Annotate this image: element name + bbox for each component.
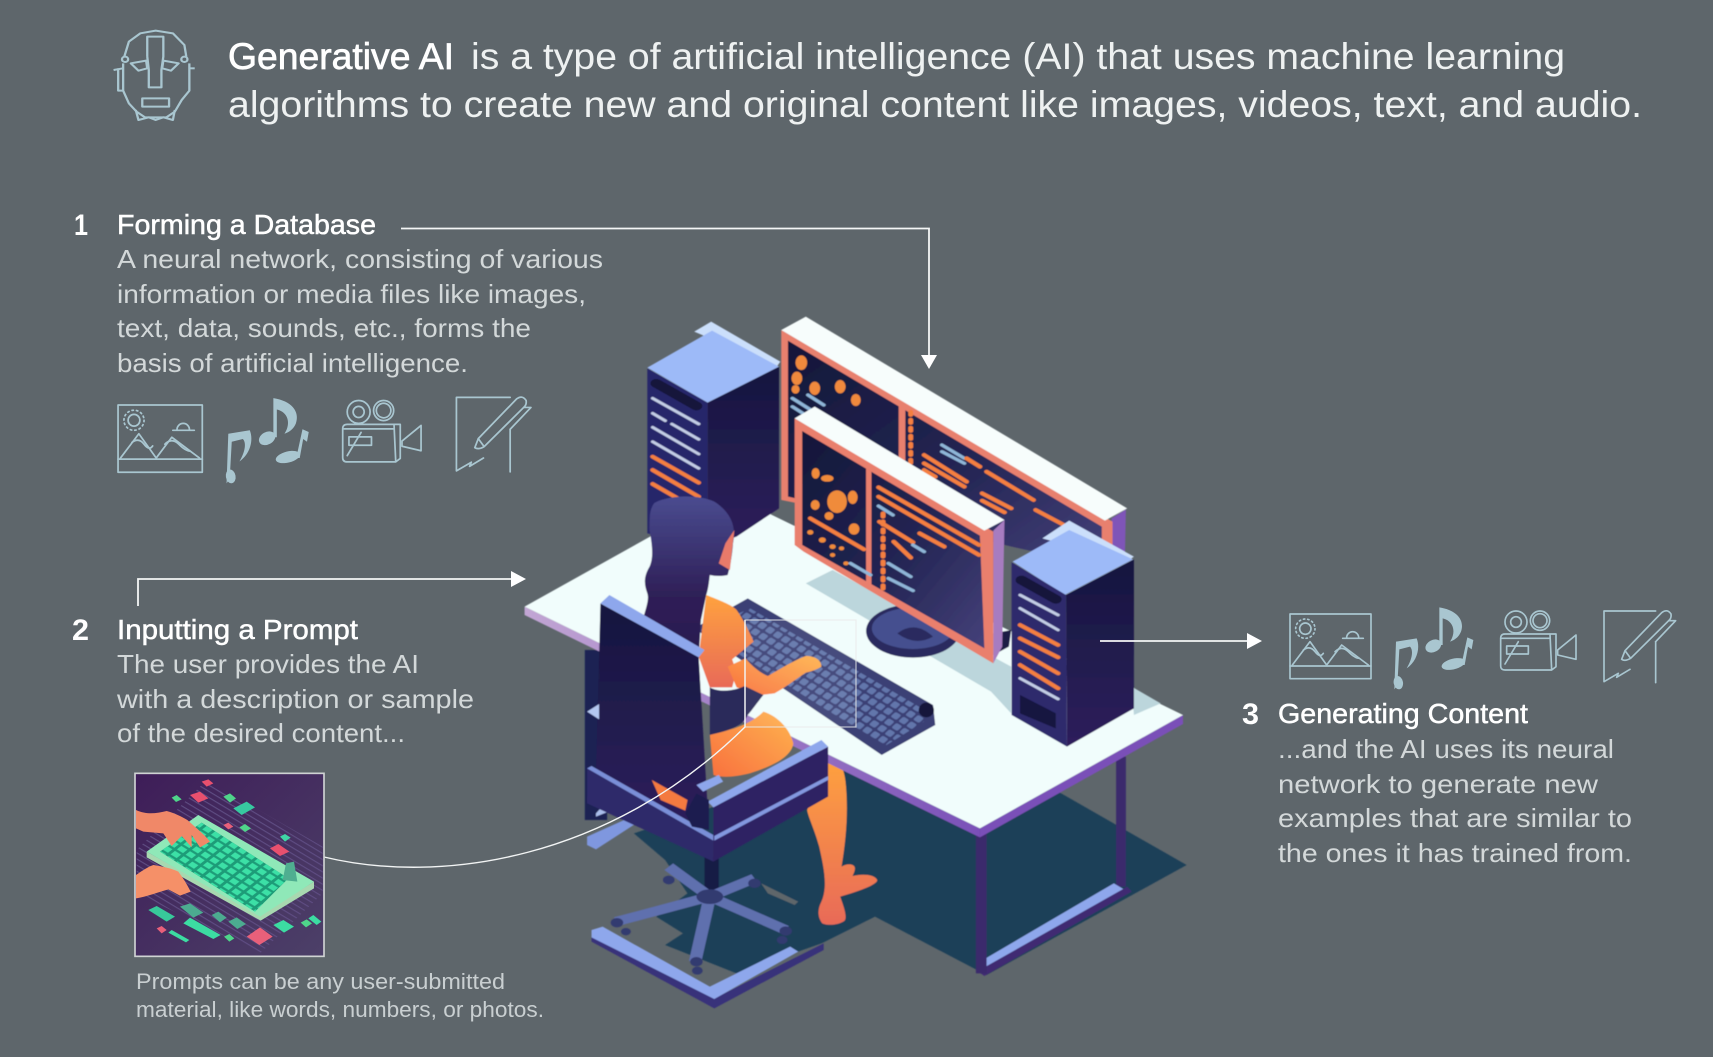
left server [647, 322, 780, 547]
inset image: keyboard prompt [135, 773, 324, 956]
step 3 text: generating content [1242, 698, 1632, 868]
inset keyboard key bed [160, 823, 288, 912]
step 2 heading: Inputting a Prompt [117, 614, 358, 645]
rear monitor screen [788, 341, 1102, 567]
chair base arms [616, 867, 786, 962]
step number 2: 2 [72, 614, 89, 647]
hidden leg [652, 780, 688, 811]
dark top [710, 686, 763, 735]
icon: film camera [343, 400, 421, 462]
zoom box on keyboard [745, 620, 856, 727]
armrest [708, 740, 828, 807]
seat right side [713, 747, 828, 862]
desk foot bar edge [976, 887, 1132, 976]
inset caption: material, like words, numbers, or photos. [136, 997, 544, 1022]
step 3 heading: Generating Content [1278, 698, 1528, 729]
chair post [704, 857, 719, 898]
keyboard base [694, 598, 935, 755]
seat lower strip [714, 776, 828, 841]
hips [710, 712, 793, 777]
rear monitor frame [781, 330, 1113, 567]
connector curve: keyboard to inset [324, 620, 745, 867]
title: Generative AI: Generative AI [228, 36, 454, 77]
step 3 description [1278, 734, 1632, 868]
chair hub [696, 889, 723, 904]
icon: music notes [225, 398, 309, 484]
left server slots [653, 383, 699, 504]
front monitor dial widget [807, 468, 859, 565]
desk edge left [525, 607, 980, 837]
inset caption [136, 969, 544, 1022]
step number 3: 3 [1242, 698, 1259, 731]
inset joystick [283, 862, 297, 882]
step 1 description: basis of artificial intelligence. [117, 348, 468, 378]
inset caption: Prompts can be any user-submitted [136, 969, 505, 994]
left server front panel [647, 368, 708, 547]
illustration: woman at isometric workstation [525, 317, 1187, 1008]
server shadow on desk [1132, 687, 1161, 715]
icons row 1: image, music, video, text [118, 397, 531, 484]
right server right face [1066, 559, 1134, 747]
step 1 description: A neural network, consisting of various [117, 244, 603, 274]
light triangles beside chair [587, 704, 599, 719]
light triangle by seat [596, 803, 613, 817]
monitor stand base [866, 604, 1011, 658]
desk back-left leg [585, 650, 607, 820]
desk edge right [980, 715, 1183, 837]
step number 1: 1 [74, 209, 88, 242]
icons row 2: generated content [1290, 607, 1676, 690]
chair back top strip [600, 595, 704, 657]
left server top [647, 331, 779, 403]
chair back panel [596, 603, 709, 830]
keyboard knob [919, 703, 934, 717]
desk front leg [976, 832, 987, 973]
small bar under chair [587, 817, 636, 849]
icon: landscape image [1290, 614, 1371, 679]
arrow: database to monitors [401, 228, 937, 369]
front monitor divider [866, 468, 871, 585]
shirt [699, 595, 754, 687]
step 3 description: ...and the AI uses its neural [1278, 734, 1614, 764]
seat left side [587, 768, 713, 862]
title: definition line 2: algorithms to create new and original content like images, videos, text, and audio. [228, 84, 1642, 125]
step 1 description: text, data, sounds, etc., forms the [117, 313, 531, 343]
front monitor side [993, 520, 1004, 663]
inset keyboard front edge [147, 852, 314, 921]
rear monitor top edge [781, 317, 1127, 521]
arm [728, 656, 821, 695]
desk foot bar [984, 883, 1125, 975]
monitor shadow on desk [806, 570, 1011, 713]
rear monitor widgets [792, 355, 861, 406]
step 2 description: The user provides the AI [117, 649, 419, 679]
right server slots [1020, 580, 1058, 728]
inset keyboard keys [160, 823, 288, 912]
rear monitor divider [899, 405, 905, 473]
chair floor frame top [592, 927, 798, 999]
step 2 description: of the desired content... [117, 718, 405, 748]
icon: pen and paper [456, 397, 531, 472]
left server right face [708, 367, 779, 547]
face [719, 530, 734, 570]
step 1 text: forming a database [74, 209, 603, 378]
desk top [525, 493, 1183, 828]
front monitor top edge [795, 407, 1004, 531]
front monitor code lines [810, 487, 979, 593]
step 2 description [116, 649, 474, 748]
inset lower hand [136, 865, 191, 898]
floor shadow, legs [585, 650, 1187, 976]
icon: music notes [1393, 607, 1473, 690]
hair [643, 497, 734, 658]
seat light edge [587, 766, 713, 841]
icon: film camera [1501, 611, 1576, 670]
step 3 description: network to generate new [1278, 769, 1598, 799]
icon: pen and paper [1604, 611, 1676, 683]
left server back strip [694, 322, 780, 367]
inset frame and background [135, 773, 324, 956]
icon: robot head [114, 31, 195, 120]
chair wheels [611, 876, 792, 975]
circuit chips [148, 779, 321, 945]
chair floor frame edge [592, 937, 824, 1008]
circuit board lines [137, 780, 323, 953]
arrow: prompt to desk [138, 571, 526, 606]
arrow: computer to generated content [1100, 633, 1262, 649]
front monitor [795, 407, 1004, 663]
step 3 description: examples that are similar to [1278, 803, 1632, 833]
header: robot icon and definition [114, 31, 1642, 125]
title: definition line 1: is a type of artificial intelligence (AI) that uses machine learning [471, 36, 1565, 77]
step 2 text: inputting a prompt [72, 614, 474, 748]
step 2 description: with a description or sample [116, 684, 474, 714]
light wedge on floor [761, 883, 798, 905]
step 3 description: the ones it has trained from. [1278, 838, 1632, 868]
step 1 description: information or media files like images, [117, 279, 586, 309]
armrest small support [696, 775, 723, 792]
front monitor screen [802, 431, 984, 648]
floor shadow [634, 763, 1187, 975]
keyboard [694, 598, 935, 755]
right server front panel [1012, 562, 1067, 747]
inset upper hand [136, 810, 210, 847]
keyboard keys [701, 608, 924, 747]
rear monitor purple side [1112, 509, 1126, 553]
icon: landscape image [118, 405, 202, 472]
right server [1012, 521, 1134, 747]
right server top [1013, 530, 1133, 595]
step 1 description [117, 244, 603, 378]
chair [587, 595, 828, 1008]
step 1 heading: Forming a Database [117, 209, 376, 240]
right server back strip [1042, 521, 1134, 562]
inset keyboard body [147, 815, 314, 917]
rear monitor [781, 317, 1127, 567]
woman's right leg [807, 757, 877, 925]
front monitor frame [795, 418, 993, 663]
desk right leg [1116, 757, 1126, 887]
rear monitor code lines [792, 395, 1067, 527]
